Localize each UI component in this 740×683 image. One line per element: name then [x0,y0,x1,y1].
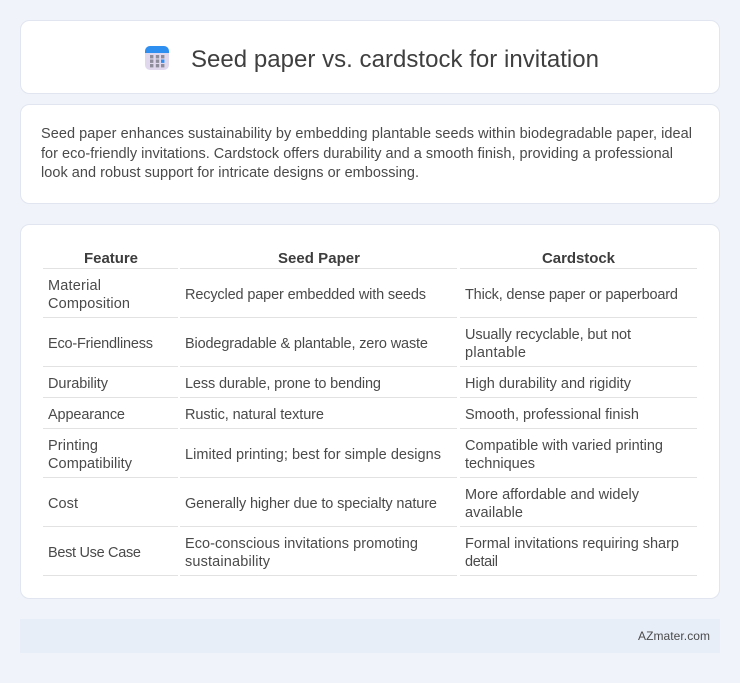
row: eco-friendliness: plantable [465,345,526,361]
row: durability: Less durable, prone to bending [185,376,381,392]
row: printing compatibility: techniques [465,456,535,472]
row: printing compatibility [48,438,663,472]
row: cost [48,487,640,521]
row: printing compatibility: Compatibility [48,456,133,472]
row: material composition: Composition [48,296,130,312]
table header: Seed Paper [278,250,360,267]
row: material composition: Recycled paper embedded with seeds [185,287,426,303]
header panel [20,20,720,94]
row: appearance: Rustic, natural texture [185,407,324,423]
panel: comparison table [20,224,720,598]
row: printing compatibility: Compatible with varied printing [465,438,663,454]
summary text: Seed paper enhances sustainability by embedding plantable seeds within biodegradable paper, ideal [41,126,692,142]
table header: Cardstock [542,250,616,267]
row: durability [48,376,632,392]
row: material composition: Thick, dense paper or paperboard [465,287,678,303]
row: best use case: sustainability [185,554,271,570]
row: material composition: Material [48,278,101,294]
row: cost: available [465,505,523,521]
row: printing compatibility: Printing [48,438,98,454]
panel: summary [20,104,720,204]
row: printing compatibility: Limited printing; best for simple designs [185,447,441,463]
row: best use case: Eco-conscious invitations promoting [185,536,418,552]
row: cost: More affordable and widely [465,487,640,503]
title: Seed paper vs. cardstock for invitation [191,46,599,73]
row: eco-friendliness [48,327,631,361]
row: material composition [48,278,678,312]
row: eco-friendliness: Usually recyclable, but not [465,327,631,343]
footer [20,619,720,653]
row: eco-friendliness: Biodegradable & plantable, zero waste [185,336,428,352]
summary text: look and robust support for intricate designs or embossing. [41,165,419,181]
table header [84,250,616,267]
table header: Feature [84,250,138,267]
row: appearance [48,407,639,423]
row: appearance: Smooth, professional finish [465,407,639,423]
summary text: for eco-friendly invitations. Cardstock offers durability and a smooth finish, providing a professional [41,146,673,162]
row: durability: High durability and rigidity [465,376,632,392]
icon: calendar [145,46,169,70]
row: cost: Generally higher due to specialty nature [185,496,437,512]
row: best use case: Best Use Case [48,545,141,561]
row: durability: Durability [48,376,109,392]
row: appearance: Appearance [48,407,125,423]
row: eco-friendliness: Eco-Friendliness [48,336,153,352]
row: best use case: Formal invitations requiring sharp [465,536,679,552]
row: cost: Cost [48,496,78,512]
footer credit: AZmater.com [638,629,710,643]
row: best use case [48,536,679,570]
summary text [41,126,692,181]
row: best use case: detail [465,554,498,570]
